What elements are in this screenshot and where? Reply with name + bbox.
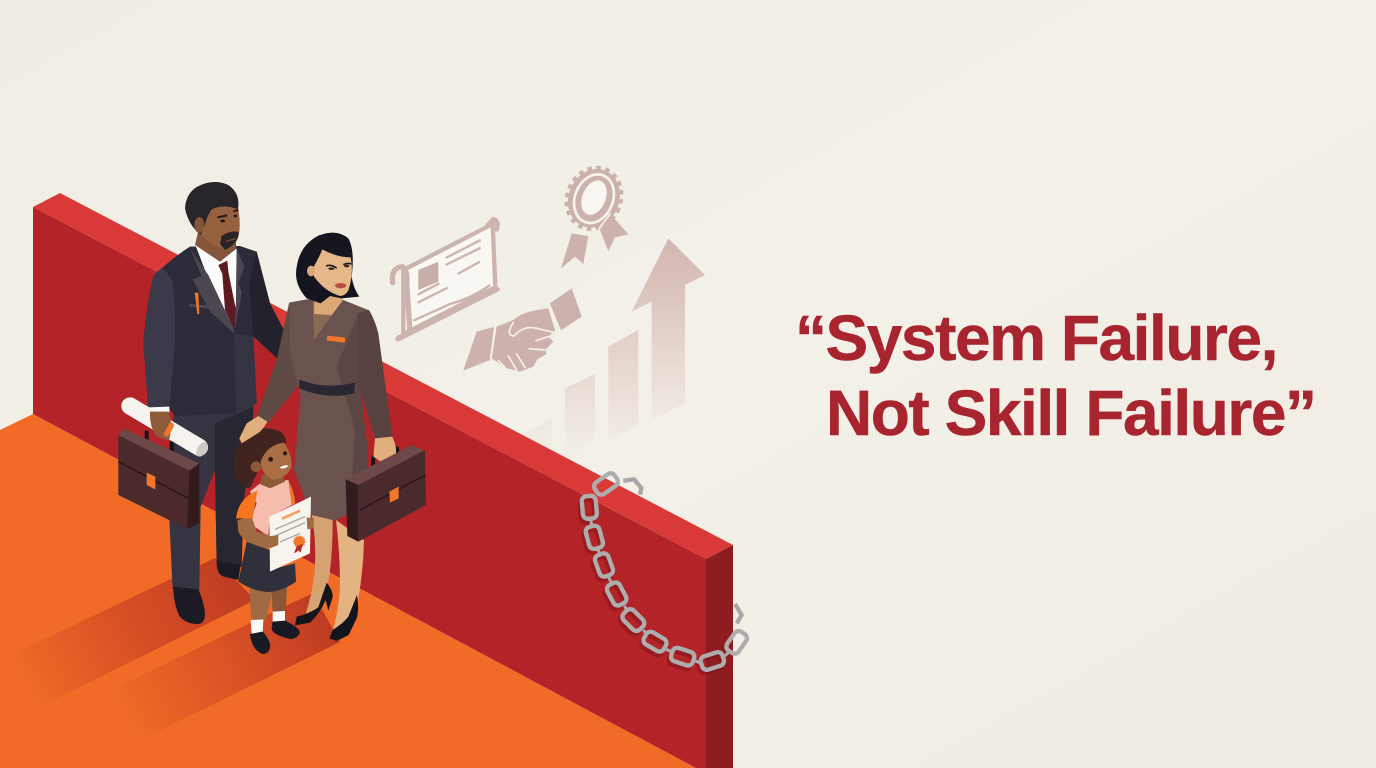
man shoes bbox=[173, 562, 241, 624]
man pocket and pen bbox=[189, 305, 209, 307]
woman left sleeve bbox=[257, 303, 303, 422]
child hair back bbox=[233, 428, 286, 488]
child top bbox=[249, 480, 295, 536]
man bbox=[118, 182, 286, 624]
chain shadow bbox=[579, 499, 723, 675]
woman name tag bbox=[327, 336, 345, 343]
diploma band bbox=[167, 425, 171, 434]
icon: award rosette bbox=[559, 161, 629, 268]
wall front face bbox=[33, 207, 706, 768]
child skirt bbox=[238, 542, 296, 592]
man hand bbox=[150, 412, 171, 441]
right briefcase bbox=[346, 437, 426, 542]
icon: handshake bbox=[463, 288, 582, 372]
chain across wall bbox=[579, 471, 749, 675]
man neck bbox=[195, 227, 236, 262]
woman neck bbox=[314, 282, 343, 315]
woman hand on child's head bbox=[239, 416, 267, 443]
child face bbox=[261, 443, 292, 480]
people bbox=[118, 182, 426, 654]
rolled diploma bbox=[130, 406, 210, 459]
wall side face bbox=[706, 545, 733, 768]
red wall bbox=[33, 193, 733, 768]
floor shadows bbox=[0, 558, 340, 737]
man ear bbox=[194, 217, 204, 233]
floating icons: achievements bbox=[392, 161, 705, 460]
quote bbox=[795, 302, 1316, 449]
left briefcase bbox=[118, 429, 199, 529]
floor bbox=[0, 414, 696, 768]
child bbox=[233, 416, 314, 654]
child legs bbox=[249, 587, 273, 621]
wall top face bbox=[33, 193, 733, 559]
man trousers bbox=[169, 405, 253, 591]
man beard and eyes bbox=[220, 231, 239, 250]
man shirt and tie bbox=[195, 244, 237, 328]
chain links bbox=[581, 471, 749, 671]
woman bbox=[257, 233, 426, 641]
man jacket bbox=[143, 246, 286, 416]
child hands bbox=[267, 517, 314, 548]
woman right sleeve bbox=[358, 310, 392, 439]
woman neckline bbox=[313, 299, 343, 340]
woman dress bbox=[289, 299, 369, 521]
child sleeve and arm bbox=[237, 517, 277, 548]
quote line 2: Not Skill Failure” bbox=[826, 377, 1316, 449]
quote line 1: “System Failure, bbox=[795, 302, 1277, 374]
child certificate bbox=[269, 497, 311, 572]
child neck bbox=[260, 472, 285, 488]
man lapels bbox=[190, 248, 244, 333]
woman face bbox=[313, 249, 352, 296]
child shoes bbox=[250, 621, 300, 654]
woman heels bbox=[295, 583, 358, 641]
woman legs bbox=[305, 513, 333, 616]
man hair bbox=[185, 182, 238, 235]
woman hair bbox=[296, 233, 359, 303]
man face bbox=[197, 202, 240, 250]
man shirt cuff bbox=[148, 407, 169, 413]
child socks bbox=[251, 611, 285, 634]
icon: scroll certificate bbox=[392, 219, 497, 339]
woman belt bbox=[299, 379, 355, 396]
icon: growth arrow and bars bbox=[525, 238, 705, 460]
woman right hand bbox=[373, 437, 396, 464]
